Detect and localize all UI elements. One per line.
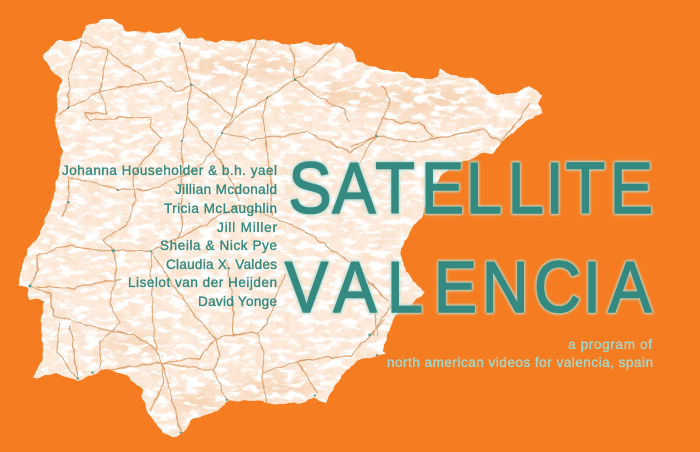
title letters: SATELLITE: [288, 148, 653, 229]
artist names: Claudia X. Valdes: [166, 257, 277, 272]
artist names: Jill Miller: [217, 220, 278, 235]
title: SATELLITE VALENCIA: [285, 148, 653, 328]
artist names: Jillian Mcdonald: [175, 182, 277, 197]
artist names: David Yonge: [198, 294, 277, 309]
title glow: SATELLITE: [288, 148, 653, 229]
title glow: [285, 148, 653, 328]
terrain relief: [10, 10, 550, 445]
artist names: Liselot van der Heijden: [128, 275, 277, 290]
map of the Iberian peninsula: [10, 10, 550, 445]
artist names: Johanna Householder & b.h. yael: [62, 163, 277, 178]
subtitle: a program of: [568, 337, 652, 352]
artist names: Tricia McLaughlin: [164, 201, 277, 216]
title glow: VALENCIA: [285, 247, 652, 328]
land fill: [10, 10, 550, 445]
title letters: [285, 148, 653, 328]
subtitle: [387, 337, 653, 370]
artist names: [62, 163, 278, 309]
title letters: VALENCIA: [285, 247, 652, 328]
artist names: Sheila & Nick Pye: [160, 238, 277, 253]
city markers: [28, 42, 378, 434]
subtitle: north american videos for valencia, spain: [387, 355, 653, 370]
roads: [30, 40, 530, 432]
